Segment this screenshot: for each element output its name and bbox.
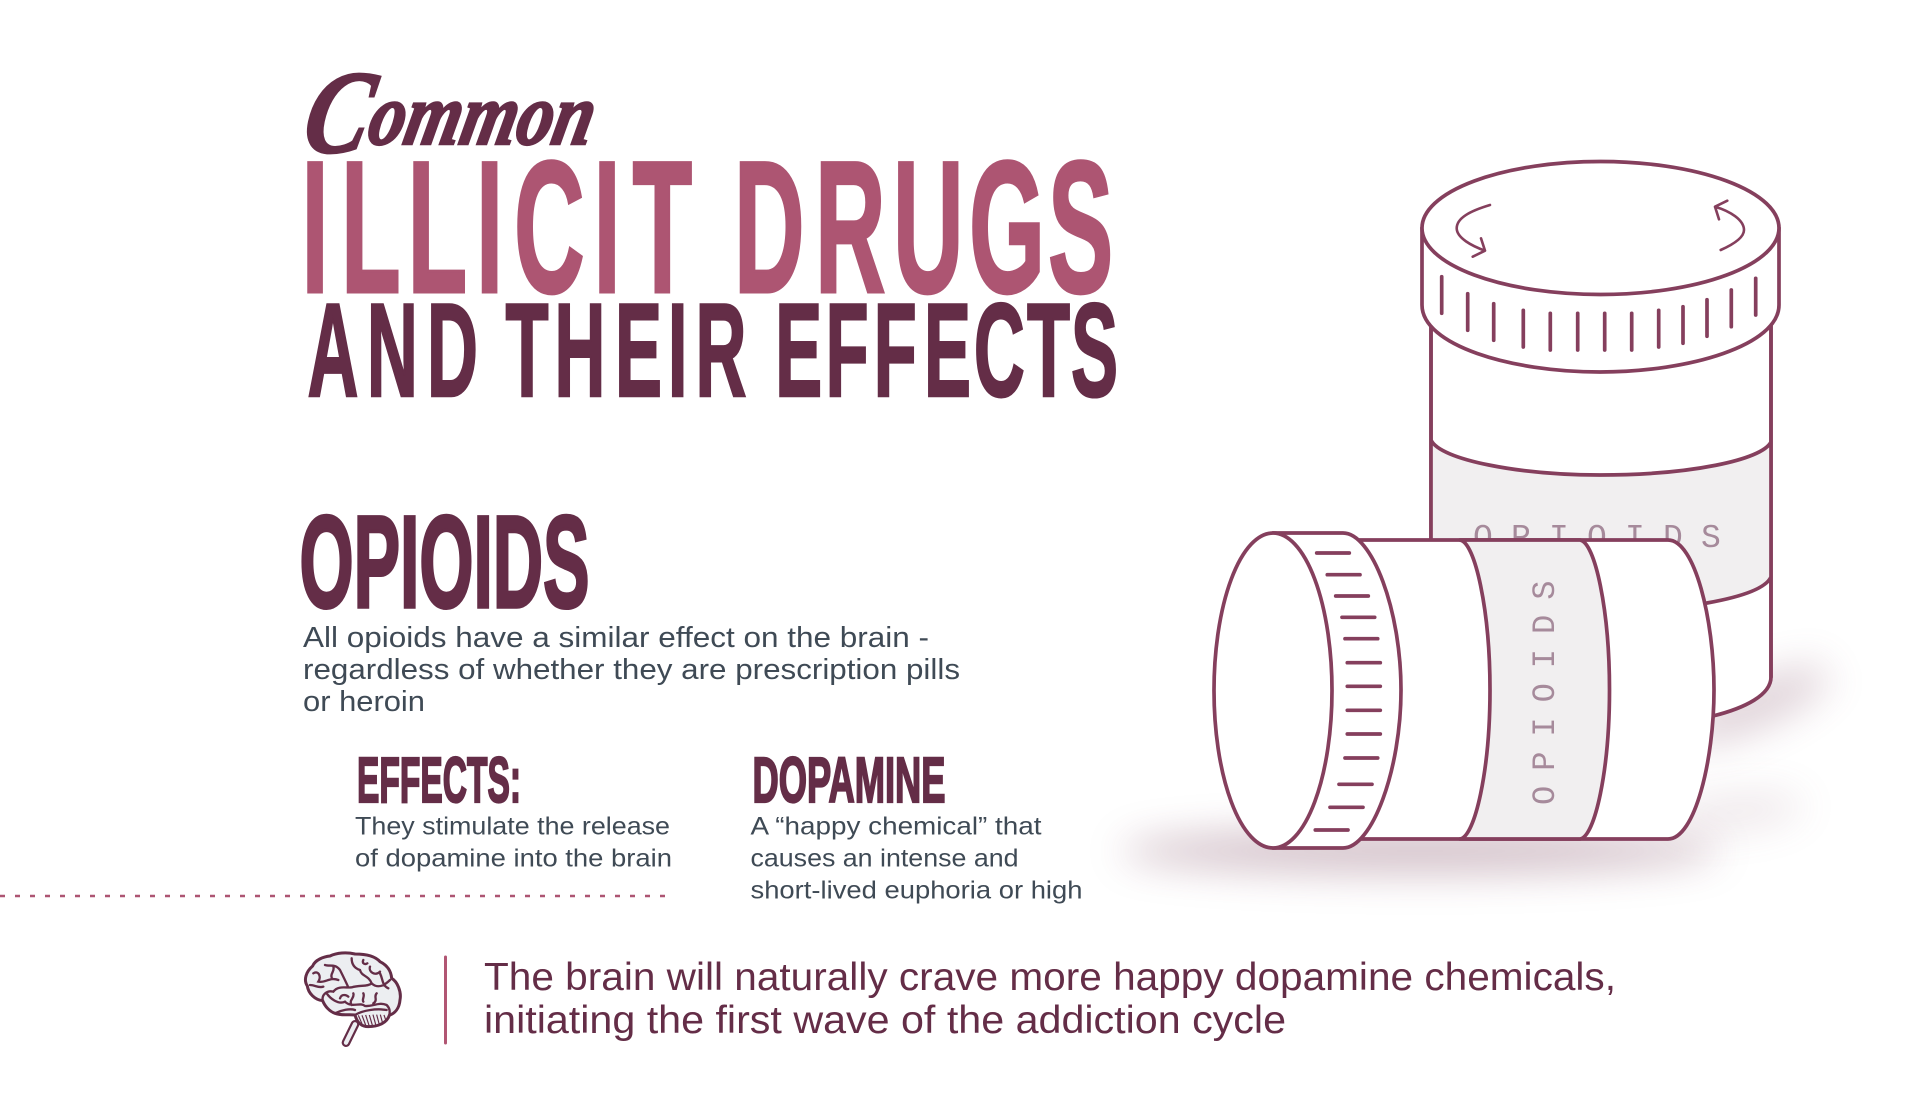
effects text [355,812,672,872]
description text: regardless of whether they are prescription pills [303,654,960,686]
icon: brain [305,953,400,1043]
column: dopamine [750,744,1082,904]
heading: and their effects: AND THEIR EFFECTS [308,276,1118,425]
dopamine text [750,812,1082,904]
lying bottle [1214,533,1714,848]
callout text: The brain will naturally crave more happy dopamine chemicals, [484,956,1616,999]
dopamine text: short-lived euphoria or high [750,876,1082,904]
dopamine text: A “happy chemical” that [750,812,1042,840]
label text: OPIOIDS [1473,520,1739,557]
column: effects [355,744,672,872]
divider line [444,957,447,1043]
callout text [484,956,1616,1042]
effects text: They stimulate the release [355,812,670,840]
bottle label [1431,440,1771,640]
effects text: of dopamine into the brain [355,844,672,872]
heading: illicit drugs: ILLICIT DRUGS [301,121,1113,332]
script heading: Common: C [294,47,387,178]
section: opioids [300,488,960,718]
icon: rotate arrow right [1715,201,1744,250]
bottle shadows [1120,652,1837,873]
bottle cap [1214,533,1401,848]
dopamine text: causes an intense and [750,844,1018,872]
callout text: initiating the first wave of the addiction cycle [484,999,1286,1042]
callout: addiction cycle [305,953,1616,1043]
upright bottle [1422,162,1779,730]
icon: rotate arrow left [1457,205,1490,257]
bottle body [1431,320,1771,730]
bottle cap [1422,162,1779,372]
illustration: pill bottles [1120,162,1837,873]
bottle label [1460,540,1610,839]
label text: OPIOIDS [1527,566,1564,805]
subheading: effects: EFFECTS: [357,744,521,816]
description text: All opioids have a similar effect on the brain - [303,622,929,654]
script heading: Common: ommon [361,67,605,164]
heading: opioids: OPIOIDS [300,488,590,635]
description text [303,622,960,718]
bottle body [1350,540,1714,839]
description text: or heroin [303,686,425,718]
title [294,47,1118,425]
subheading: dopamine: DOPAMINE [752,744,946,816]
